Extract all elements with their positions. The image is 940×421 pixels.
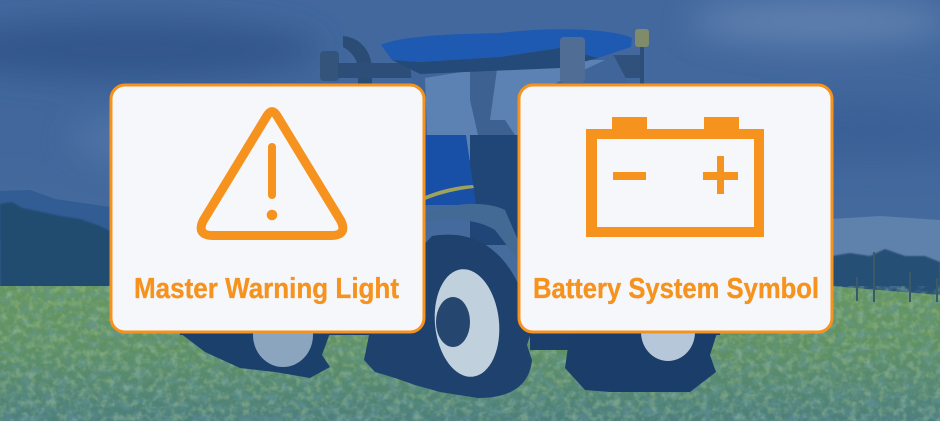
tractor: blue cab roof bbox=[381, 29, 632, 62]
heading: master warning light: Master Warning Light bbox=[134, 273, 399, 305]
icon: battery bbox=[586, 117, 764, 237]
heading: battery system symbol: Battery System Symbol bbox=[533, 273, 819, 305]
background: grass field bbox=[0, 286, 940, 421]
tractor: right mirror bbox=[560, 37, 585, 83]
tractor bbox=[180, 29, 720, 398]
tractor: exhaust and mirrors bbox=[320, 29, 649, 92]
tractor: rear-left wheel bbox=[180, 303, 330, 378]
tractor: chassis bbox=[180, 322, 720, 350]
tractor: engine dark bbox=[470, 135, 520, 245]
tractor: right wheel bbox=[565, 303, 717, 392]
tractor: hood bbox=[425, 135, 476, 205]
background: distant hills and trees bbox=[0, 190, 940, 295]
tractor: fender bbox=[425, 204, 518, 260]
background: fence posts bbox=[856, 252, 938, 302]
background: sky bbox=[0, 0, 940, 300]
tractor: front wheel bbox=[364, 235, 532, 398]
card background bbox=[519, 85, 832, 332]
card background bbox=[111, 85, 424, 332]
tractor: cab window bbox=[425, 60, 605, 160]
panel: master warning light bbox=[111, 85, 424, 332]
tractor: hood stripe bbox=[425, 185, 474, 200]
panel: battery system symbol bbox=[519, 85, 832, 332]
tractor: cab bbox=[410, 52, 632, 200]
tractor: roof underside bbox=[392, 48, 598, 74]
icon: warning triangle bbox=[201, 112, 343, 236]
